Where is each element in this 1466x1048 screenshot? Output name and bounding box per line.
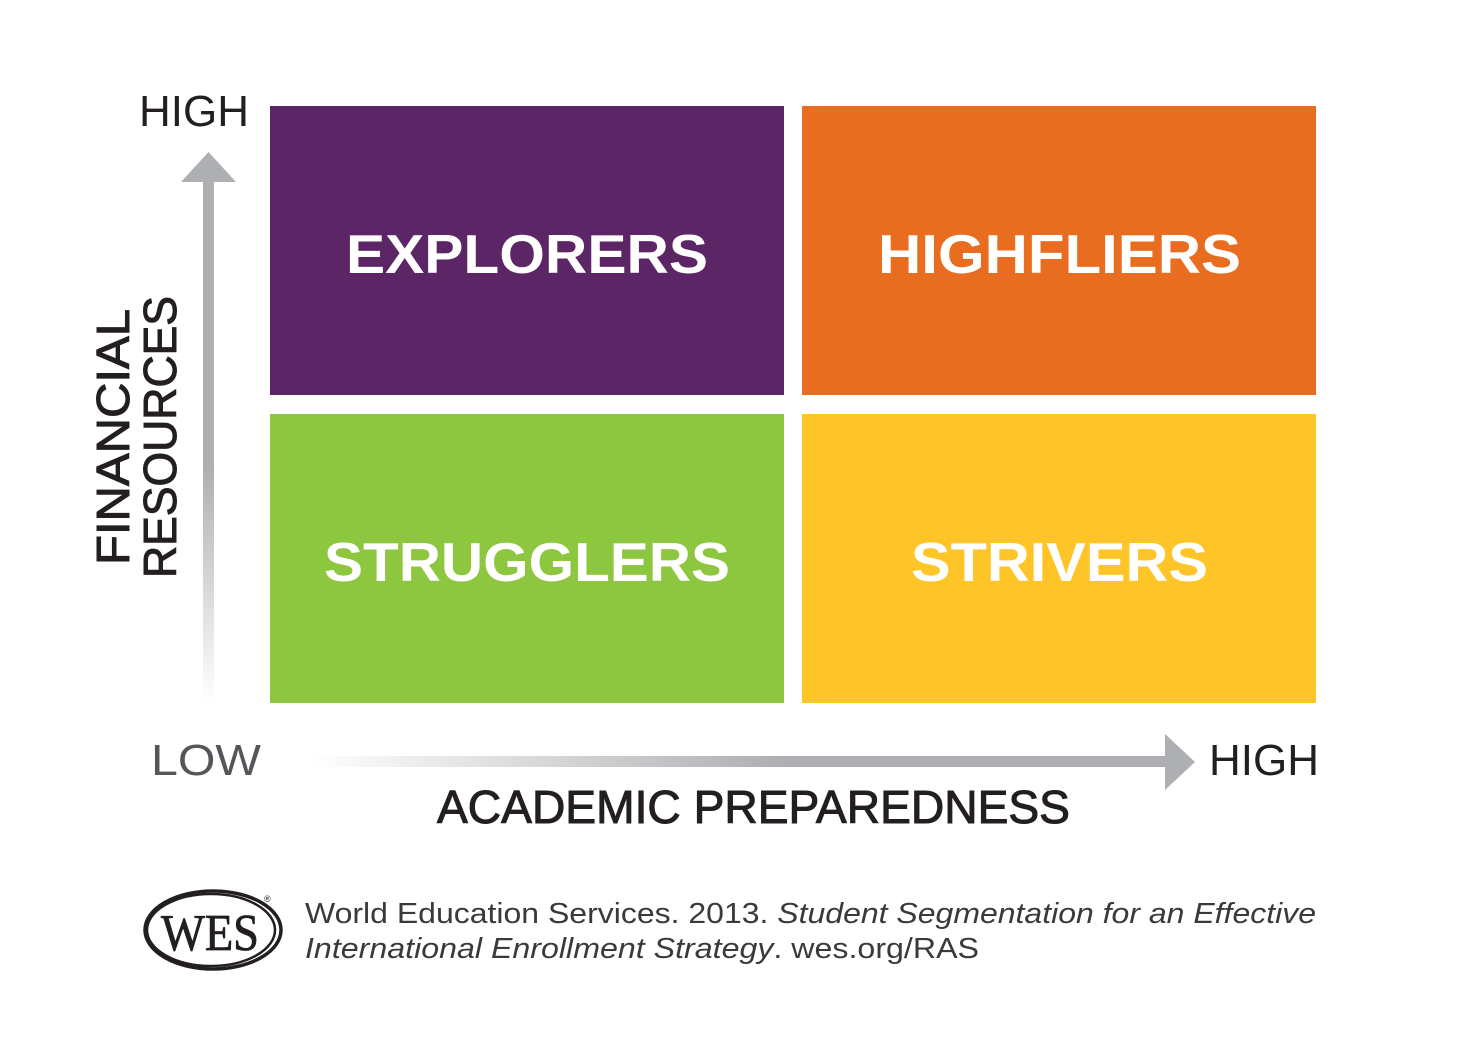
source citation [305,898,1316,965]
panel: strivers: STRIVERS [911,531,1208,593]
panel: explorers: EXPLORERS [346,223,708,285]
icon: WES logo [145,891,281,969]
source citation: International Enrollment Strategy . wes.org/RAS [305,933,979,965]
panel: explorers [270,106,784,395]
source citation: World Education Services. 2013. Student Segmentation for an Effective [305,898,1316,930]
icon: WES logo: WES [161,905,259,962]
y-axis title: financial resources [87,296,186,578]
panel: highfliers: HIGHFLIERS [878,223,1241,285]
panel: strugglers: STRUGGLERS [324,531,730,593]
y-axis title: financial resources: RESOURCES [134,296,186,578]
x-axis high label: HIGH [1209,736,1319,785]
arrow: academic preparedness axis [310,734,1195,790]
x-axis title: academic preparedness: ACADEMIC PREPAREDNESS [437,781,1070,833]
y-axis high label: HIGH [139,87,249,136]
arrow: financial resources axis [181,152,236,702]
panel: strivers [802,414,1316,703]
panel: strugglers [270,414,784,703]
x-axis low label: LOW [151,736,262,785]
panel: highfliers [802,106,1316,395]
icon: WES logo: ® [264,894,271,904]
y-axis title: financial resources: FINANCIAL [87,309,139,565]
